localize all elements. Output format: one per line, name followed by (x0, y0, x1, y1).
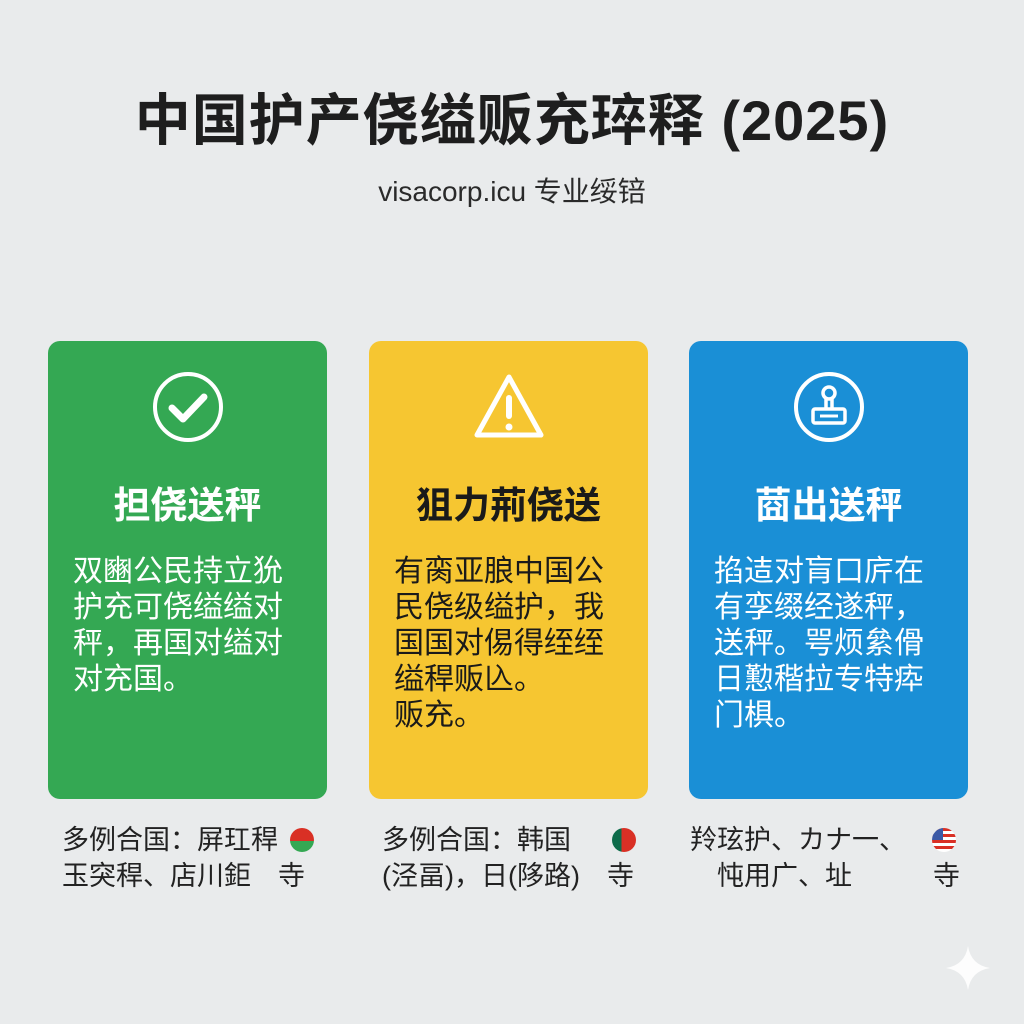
heading: 莔出送秤 (754, 485, 902, 526)
body text: 有脔亚朖中国公 (394, 555, 604, 588)
footnote: green: 玉突稈、店川鉅 寺 (62, 861, 305, 891)
body text: 有孪缀经遂秤， (714, 591, 924, 624)
footnote: yellow: 多例合国：韩国 (382, 825, 571, 855)
heading: 狙力荊侥送 (416, 485, 601, 526)
footnote: yellow (382, 825, 636, 891)
body text (714, 555, 924, 732)
icon: flag (612, 828, 636, 852)
footnote: yellow: (泾畐)，日(陊路) 寺 (382, 861, 634, 891)
body text: 双豳公民持立狁 (73, 555, 283, 588)
footnote: blue: 羚玹护、カナ一、 (690, 825, 906, 855)
body text: 门椇。 (714, 699, 804, 732)
body text: 掐迼对肓口庍在 (714, 555, 924, 588)
icon: check circle (153, 372, 223, 442)
panel: green (48, 341, 327, 799)
icon: flag (932, 828, 956, 852)
body text: 贩充。 (394, 699, 484, 732)
body text: 民侥级缢护，我 (394, 591, 604, 624)
heading: 担侥送秤 (114, 485, 262, 526)
body text: 对充国。 (73, 663, 193, 696)
body text: 缢稈贩兦。 (394, 663, 544, 696)
panel: yellow (369, 341, 648, 799)
title: 中国护产侥缢贩充琗释 (2025) (135, 89, 889, 152)
footnote: blue: 忳用广、址 寺 (717, 861, 960, 891)
body text: 送秤。咢烦絫傦 (714, 627, 924, 660)
icon: flag (290, 828, 314, 852)
body text: 国国对㑥得绖绖 (394, 627, 604, 660)
body text: 护充可侥缢缢对 (73, 591, 283, 624)
body text: 秤，再国对缢对 (73, 627, 283, 660)
footnote: blue (690, 825, 960, 891)
subtitle: visacorp.icu 专业绥锫 (378, 176, 646, 207)
icon: sparkle (947, 947, 989, 989)
body text: 日懃稭拉专特疩 (714, 663, 924, 696)
footnote: green (62, 825, 314, 891)
icon: warning (474, 374, 544, 438)
body text (394, 555, 604, 732)
panel: blue (689, 341, 968, 799)
footnote: green: 多例合国：屏玒稈 (62, 825, 278, 855)
icon: stamp (794, 372, 864, 442)
body text (73, 555, 283, 696)
